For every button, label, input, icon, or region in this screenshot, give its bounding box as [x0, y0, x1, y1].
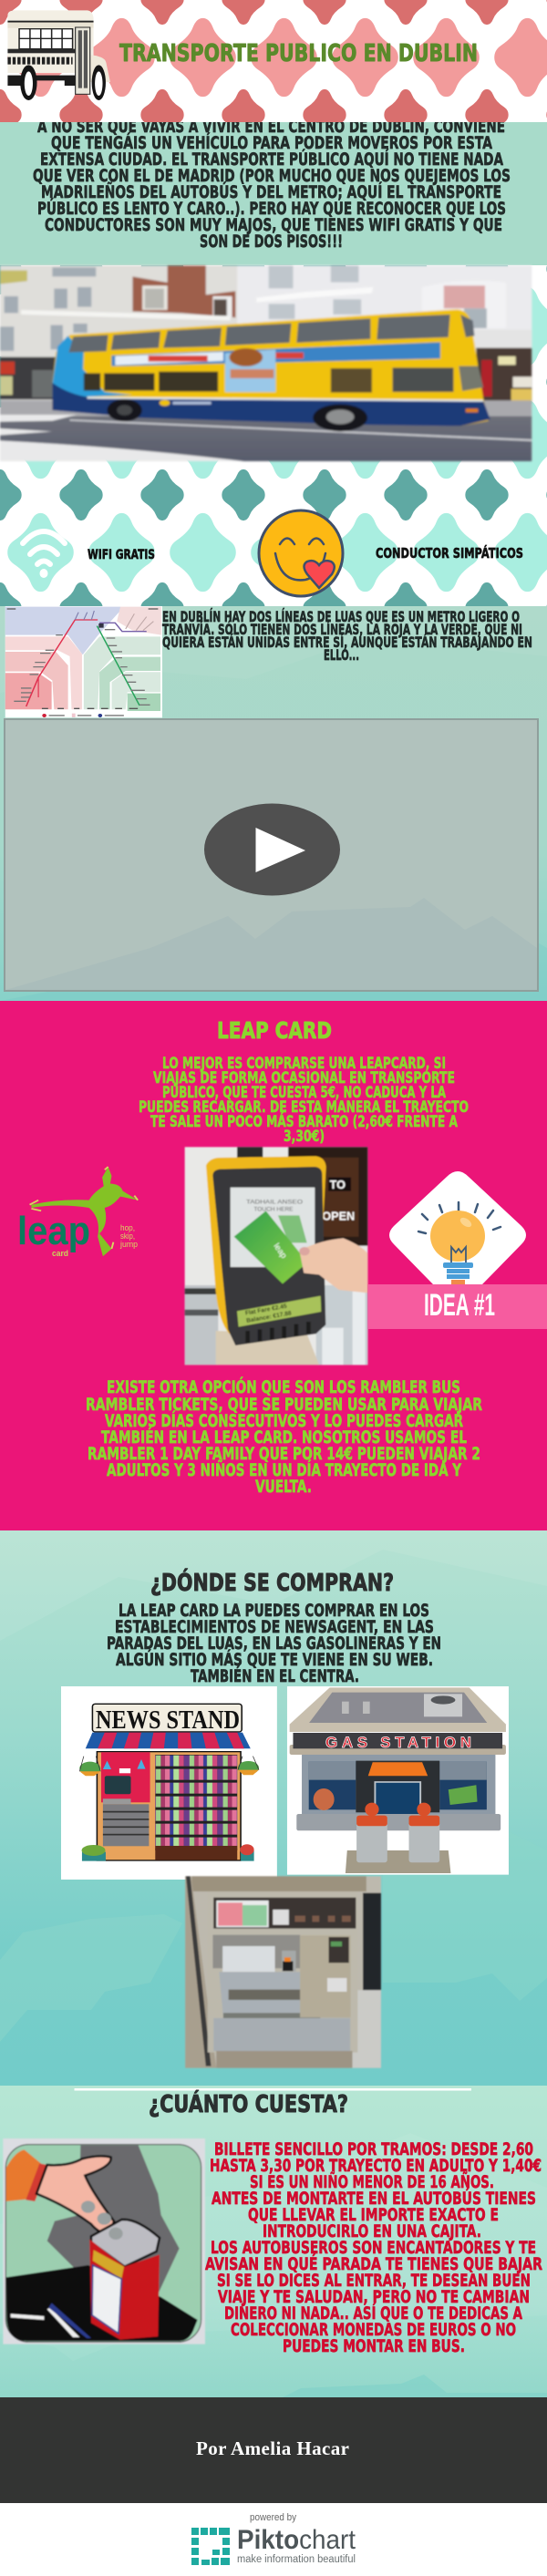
- photo: luas ticket machine: [185, 1876, 381, 2068]
- heading: donde se compran: ¿DÓNDE SE COMPRAN?: [150, 1568, 394, 1597]
- map: Luas lines: [5, 606, 162, 717]
- footer: piktochart branding: Piktochart: [237, 2525, 356, 2555]
- logo: leap card frog: leap: [17, 1209, 90, 1253]
- footer: piktochart branding: powered by: [250, 2512, 296, 2523]
- panel: how much it costs: [0, 2086, 547, 2397]
- label: idea #1: IDEA #1: [424, 1288, 495, 1323]
- illustration: gas station: [287, 1686, 509, 1875]
- photo: card reader: [185, 1147, 367, 1365]
- photo: card reader: Balance: €17.88: [246, 1310, 292, 1324]
- label: news stand sign: NEWS STAND: [96, 1705, 240, 1735]
- photo: card reader: TOUCH HERE: [253, 1207, 294, 1213]
- heading: cuanto cuesta: ¿CUÁNTO CUESTA?: [149, 2089, 348, 2118]
- text: leap card intro: LO MEJOR ES COMPRARSE UNA LEAPCARD, SI: [162, 1055, 446, 1072]
- text: luas description: ELLO...: [324, 646, 359, 664]
- photo: card reader: OPEN: [322, 1210, 355, 1222]
- heading: leap card: LEAP CARD: [217, 1017, 332, 1044]
- illustration: news stand: [61, 1686, 277, 1880]
- panel: luas section background: [0, 606, 547, 1001]
- text: where to buy description: LA LEAP CARD LA PUEDES COMPRAR EN LOS: [119, 1601, 429, 1621]
- text: fares: [205, 2139, 542, 2356]
- panel: where to buy: [0, 1530, 547, 2086]
- text: leap card intro: [139, 1055, 469, 1145]
- logo: leap card frog: card: [52, 1249, 68, 1258]
- video placeholder: [5, 719, 538, 991]
- logo: leap card frog: jump: [119, 1240, 138, 1249]
- footer: author: Por Amelia Hacar: [196, 2437, 349, 2459]
- panel: header: [0, 0, 547, 122]
- text: leap card intro: VIAJAS DE FORMA OCASIONAL EN TRANSPORTE: [153, 1069, 455, 1087]
- text: rambler tickets: [86, 1377, 482, 1497]
- logo: leap card frog: skip,: [120, 1231, 135, 1241]
- icon: piktochart logo: [191, 2528, 230, 2565]
- photo: Dublin double-decker bus: [0, 265, 532, 461]
- logo: leap card frog: [17, 1167, 138, 1258]
- icon: school bus: [7, 10, 110, 100]
- panel: intro background: [0, 122, 547, 265]
- band: idea number one: [368, 1171, 547, 1329]
- text: rambler tickets: VUELTA.: [255, 1478, 312, 1497]
- illustration: exact fare box: [3, 2138, 205, 2344]
- logo: leap card frog: hop,: [120, 1223, 135, 1232]
- text: where to buy description: ALGÚN SITIO MÁS QUE TE VIENE EN SU WEB.: [116, 1648, 433, 1670]
- text: leap card intro: PÚBLICO, QUE TE CUESTA 5€, NO CADUCA Y LA: [162, 1084, 446, 1101]
- text: luas description: [162, 608, 532, 664]
- label: wifi gratis: WIFI GRATIS: [88, 548, 155, 562]
- icon: light bulb: [389, 1171, 526, 1284]
- text: where to buy description: [107, 1601, 441, 1686]
- panel: leap card: [0, 1001, 547, 1530]
- photo: card reader: Flat Fare €2.45: [244, 1303, 288, 1317]
- photo: card reader: TO: [330, 1179, 346, 1191]
- footer: piktochart branding: [0, 2503, 547, 2576]
- icon: wifi: [23, 531, 65, 578]
- text: where to buy description: TAMBIÉN EN EL CENTRA.: [191, 1665, 359, 1686]
- panel: teal pattern band: [0, 265, 547, 606]
- photo: card reader: TADHAIL ANSEO: [246, 1200, 303, 1206]
- footer: piktochart branding: make information beautiful: [237, 2554, 356, 2565]
- panel: intro text: SON DE DOS PISOS!!!: [200, 232, 343, 252]
- photo: card reader: leap: [272, 1242, 289, 1260]
- text: fares: PUEDES MONTAR EN BUS.: [283, 2336, 465, 2356]
- label: gas station sign: GAS STATION: [325, 1734, 471, 1751]
- text: where to buy description: ESTABLECIMIENTOS DE NEWSAGENT, EN LAS: [115, 1617, 434, 1637]
- icon: smiling face with heart: [259, 510, 343, 596]
- footer: author: [0, 2397, 547, 2503]
- panel: intro text: [33, 117, 511, 252]
- text: leap card intro: 3,30€): [284, 1128, 325, 1145]
- icon: play button: [204, 804, 340, 895]
